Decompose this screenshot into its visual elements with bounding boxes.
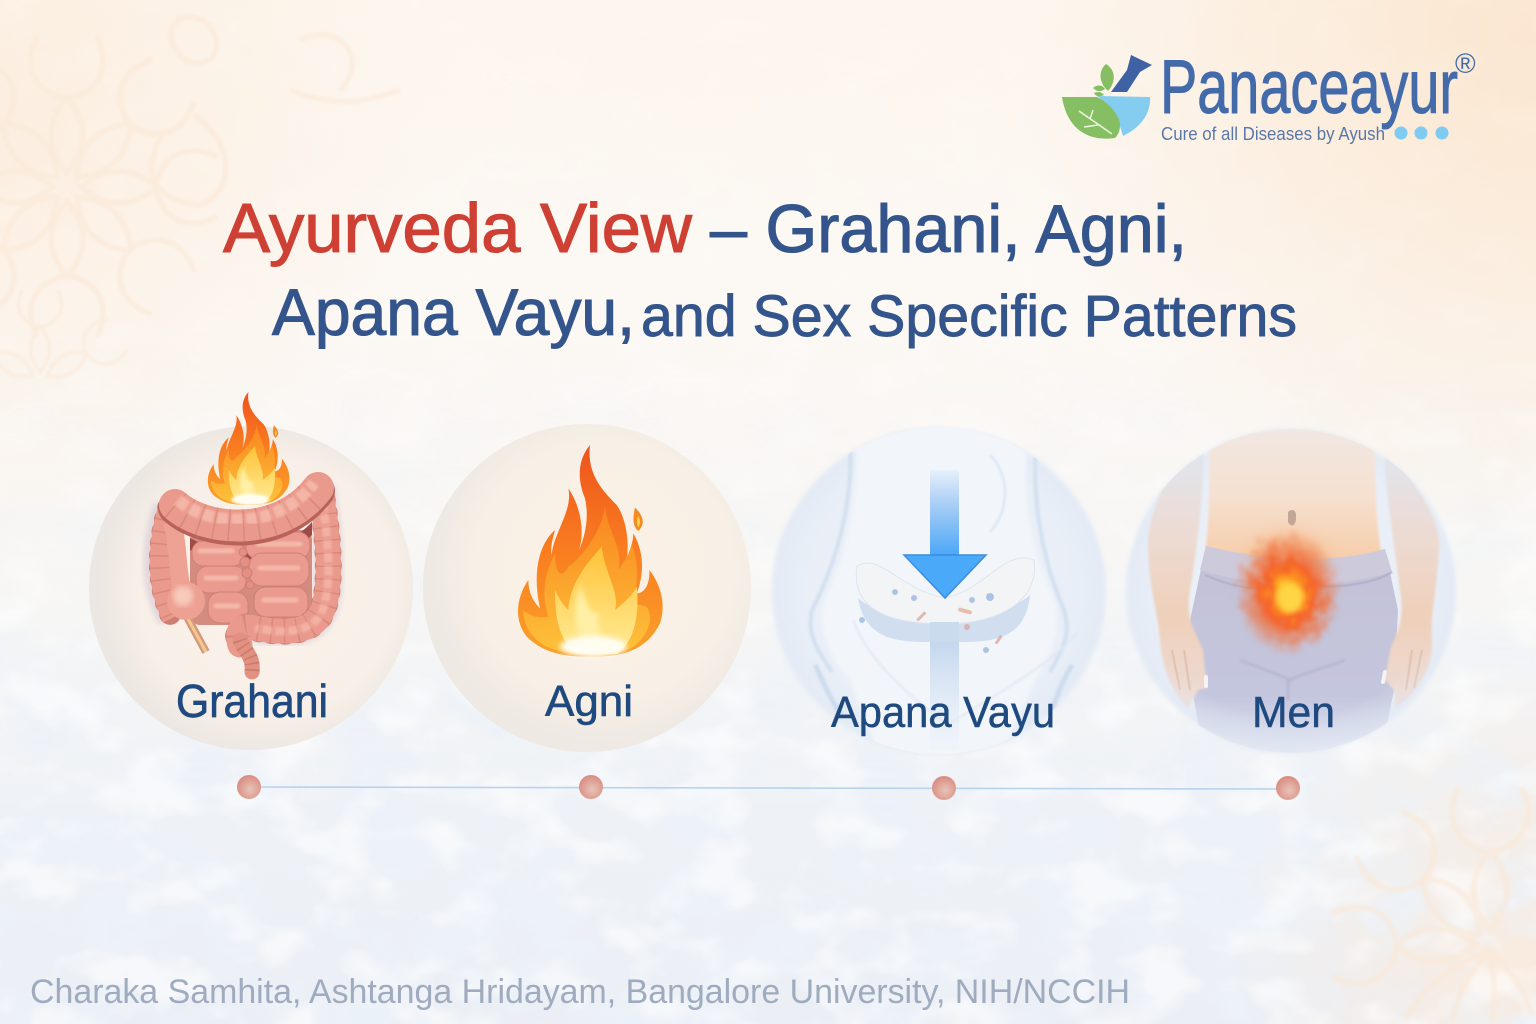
circle background	[423, 424, 751, 752]
circle background	[1126, 429, 1456, 753]
title line 1	[223, 189, 1187, 267]
icon: inflammation glow	[1234, 531, 1342, 655]
ascending colon	[160, 508, 186, 618]
sources footer: Charaka Samhita, Ashtanga Hridayam, Bangalore University, NIH/NCCIH	[30, 973, 1130, 1011]
transverse colon	[175, 483, 318, 529]
panel: Agni	[423, 424, 751, 752]
title line 2	[272, 275, 1297, 349]
panel: Men	[1126, 420, 1456, 760]
icon: small flame	[208, 392, 289, 505]
icon: large flame	[518, 445, 663, 657]
icon: downward arrow	[904, 470, 986, 598]
title line 1: – Grahani, Agni,	[710, 191, 1187, 267]
title line 2: Apana Vayu,	[272, 275, 635, 349]
illustration: male torso with inflammation	[1148, 420, 1439, 760]
timeline	[237, 775, 1300, 800]
panel: Grahani	[89, 392, 413, 750]
logo dots	[1394, 126, 1448, 140]
logo: Panaceayur	[1062, 45, 1476, 144]
circle background	[772, 428, 1106, 754]
label: Agni: Agni	[545, 677, 633, 726]
label: Men: Men	[1252, 688, 1335, 737]
icon: intestines	[158, 483, 328, 672]
logo tagline: Cure of all Diseases by Ayush	[1161, 124, 1385, 144]
panel: Apana Vayu	[772, 410, 1106, 760]
timeline dot 1	[237, 775, 261, 799]
title line 1: Ayurveda View	[223, 189, 692, 267]
timeline dot 2	[579, 775, 603, 799]
timeline dot 4	[1276, 776, 1300, 800]
circle background	[89, 426, 413, 750]
descending colon	[239, 488, 328, 672]
label: Apana Vayu: Apana Vayu	[831, 688, 1055, 737]
registered mark: ®	[1455, 48, 1476, 79]
timeline dot 3	[932, 776, 956, 800]
label: Grahani: Grahani	[176, 675, 328, 727]
title	[223, 189, 1297, 349]
title line 2: and Sex Specific Patterns	[641, 284, 1297, 349]
illustration: lower torso	[810, 410, 1077, 760]
icon: mortar, pestle and leaf	[1062, 55, 1152, 139]
